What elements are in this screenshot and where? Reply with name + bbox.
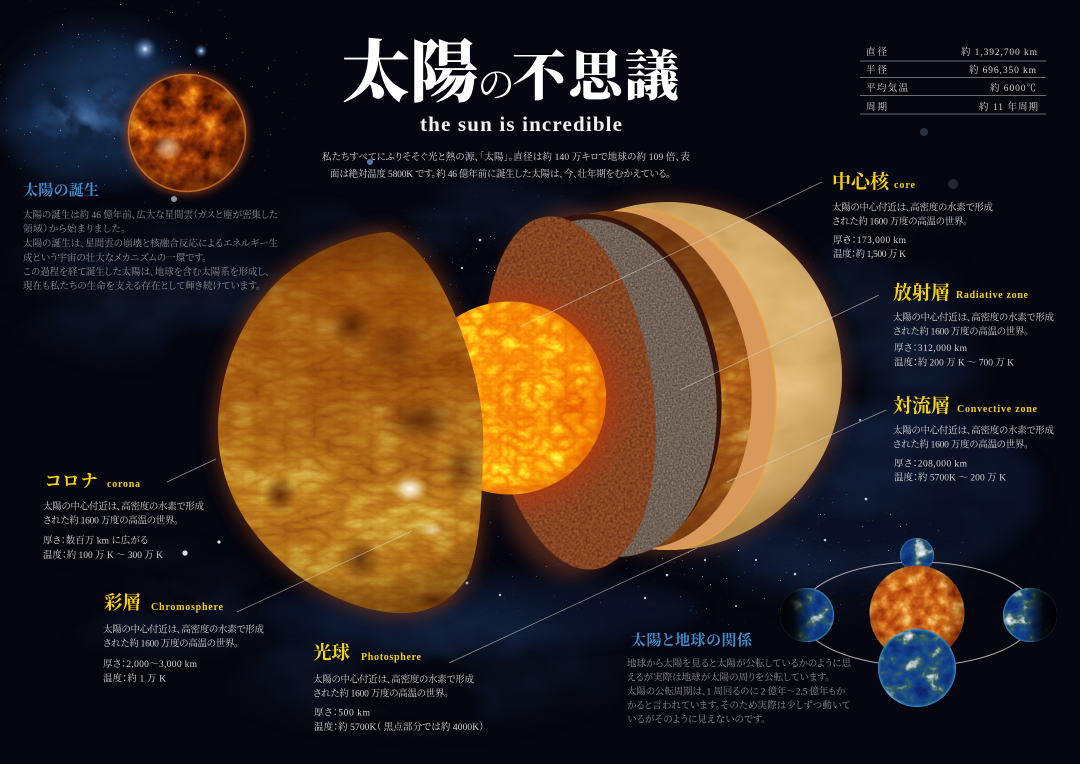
panel: convective zone: Convective zone [957,404,1038,415]
icon: earth top [900,538,934,572]
core sphere [413,302,606,494]
panel: birth of the sun: 成という宇宙の壮大なメカニズムの一環です。 [23,252,207,264]
bright stars [132,36,958,607]
panel: corona: コロナ [45,471,97,491]
panel: chromosphere: された約 1600 万度の高温の世界。 [103,638,239,650]
panel: chromosphere: 厚さ：2,000～3,000 km [103,659,198,670]
panel: core [832,171,993,260]
nebula clouds top left [5,72,165,160]
panel: convective zone [893,395,1054,484]
panel: core: 中心核 [832,171,891,193]
subtitle: the sun is incredible [420,112,622,136]
panel: convective zone: された約 1600 万度の高温の世界。 [893,438,1029,450]
panel: birth of the sun: 領域）から始まりました。 [23,223,126,235]
dark boundary band [459,197,745,573]
panel: photosphere: Photosphere [361,652,422,663]
data table [860,46,1046,114]
panel: sun and earth relationship: 地球から太陽を見ると太陽が公転しているかのように思 [627,658,851,670]
panel: corona: 太陽の中心付近は、高密度の水素で形成 [43,500,204,512]
icon: earth left [780,588,834,642]
panel: convective zone: 温度：約 5700K ～ 200 万 K [894,472,1006,484]
panel: sun and earth relationship: いるがそのように見えないのです。 [627,714,766,726]
panel: corona: corona [107,479,140,490]
intro text: 面は絶対温度 5800K です。約 46 億年前に誕生した太陽は、今、壮年期をむかえている。 [330,168,671,180]
panel: photosphere: 太陽の中心付近は、高密度の水素で形成 [313,674,474,686]
panel: radiative zone: 太陽の中心付近は、高密度の水素で形成 [893,312,1054,324]
orbit ellipse [800,562,1036,666]
data table: 周期 [866,101,887,113]
panel: birth of the sun [23,181,278,292]
gray layer [468,203,740,573]
panel: chromosphere [103,593,264,684]
panel: photosphere: 光球 [313,643,351,664]
panel: chromosphere: 彩層 [104,593,141,614]
data table: 約 6000℃ [990,82,1036,94]
panel: core: 厚さ：173,000 km [833,235,907,246]
panel: sun and earth relationship [627,631,851,726]
data table: 約 11 年周期 [979,101,1038,113]
glow around sun [218,199,845,613]
panel: sun and earth relationship: 太陽と地球の関係 [631,631,753,649]
panel: radiative zone [893,282,1054,368]
convective zone ring [614,208,776,550]
panel: corona: 温度：約 100 万 K ～ 300 万 K [43,549,163,561]
diagram: sun and earth orbit [780,538,1057,707]
panel: chromosphere: 温度：約 1 万 K [103,672,166,684]
icon: central sun [870,566,964,660]
data table: 半径 [866,64,887,76]
panel: corona: 厚さ：数百万 km に広がる [43,534,148,546]
panel: core: 温度：約 1,500 万 K [833,248,906,260]
data table: 直径 [866,46,887,58]
small sun: birth of the sun [125,71,249,195]
intro text [322,151,690,180]
panel: radiative zone: された約 1600 万度の高温の世界。 [893,326,1029,338]
panel: photosphere: 温度：約 5700K（ 黒点部分では約 4000K） [314,721,484,733]
title: 不思議 [512,47,679,107]
illustration: sun cross-section [218,189,845,613]
panel: radiative zone: 厚さ：312,000 km [894,343,968,354]
panel: core: core [894,180,916,191]
icon: earth front [878,629,956,707]
panel: core: 太陽の中心付近は、高密度の水素で形成 [832,202,993,214]
panel: chromosphere: Chromosphere [151,602,224,613]
panel: convective zone: 対流層 [893,395,950,417]
panel: corona: された約 1600 万度の高温の世界。 [43,514,179,526]
panel: radiative zone: 放射層 [893,282,950,304]
panel: chromosphere: 太陽の中心付近は、高密度の水素で形成 [103,624,264,636]
rust layer disc [488,216,656,570]
panel: photosphere: 厚さ：500 km [314,708,371,718]
panel: birth of the sun: 現在も私たちの生命を支える存在として輝き続けています。 [23,280,261,292]
title: 太陽 [342,35,478,111]
data table: 平均気温 [866,82,908,94]
panel: photosphere [313,643,484,733]
panel: birth of the sun: 太陽の誕生は、星間雲の崩壊と核融合反応によるエネルギー生 [23,238,278,250]
icon: earth right [1003,588,1057,642]
data table: 約 696,350 km [969,64,1037,76]
panel: sun and earth relationship: えるが実際は地球が太陽の周りを公転しています。 [627,672,830,684]
panel: sun and earth relationship: 太陽の公転周期は、1 周回るのに 2 億年～2.5 億年もか [627,686,845,698]
title [342,35,679,111]
leader lines [167,182,886,663]
panel: core: された約 1600 万度の高温の世界。 [832,216,968,228]
data table: 約 1,392,700 km [961,46,1038,58]
panel: convective zone: 太陽の中心付近は、高密度の水素で形成 [893,424,1054,436]
left hemisphere [218,232,484,613]
panel: sun and earth relationship: かると言われています。そのため実際は少しずつ動いて [627,700,850,712]
outer tan convective sphere [494,202,842,550]
radiative zone layer [588,211,752,548]
intro text: 私たちすべてにふりそそぐ光と熱の源、「太陽」。直径は約 140 万キロで地球の約 109 倍、表 [322,151,690,163]
panel: radiative zone: 温度：約 200 万 K ～ 700 万 K [894,356,1014,368]
title: の [477,65,515,107]
panel: radiative zone: Radiative zone [956,290,1029,301]
panel: photosphere: された約 1600 万度の高温の世界。 [313,688,449,700]
panel: corona [43,471,204,561]
panel: birth of the sun: 太陽の誕生 [23,181,99,199]
panel: birth of the sun: 太陽の誕生は約 46 億年前、広大な星間雲（ガスと塵が密集した [23,209,278,221]
panel: convective zone: 厚さ：208,000 km [894,458,968,470]
panel: birth of the sun: この過程を経て誕生した太陽は、地球を含む太陽系を形成し、 [23,266,270,278]
star field [0,0,990,650]
